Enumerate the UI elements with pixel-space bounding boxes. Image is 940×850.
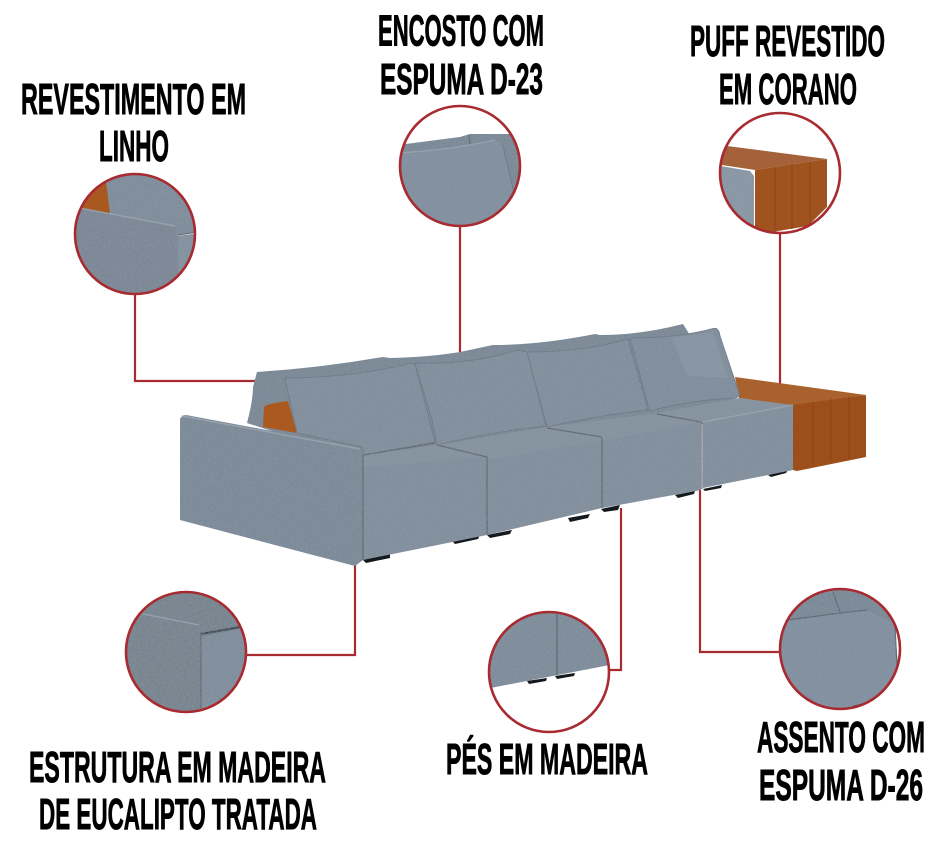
label: revestimento bbox=[21, 75, 246, 171]
orange detail bbox=[82, 182, 110, 213]
puff front bbox=[793, 395, 866, 471]
label: estrutura: ESTRUTURA EM MADEIRA bbox=[29, 743, 326, 792]
seat front bbox=[780, 610, 898, 709]
label: puff bbox=[690, 17, 885, 114]
seat tops bbox=[363, 398, 793, 470]
fabric bbox=[781, 590, 898, 708]
orange inner arm bbox=[263, 401, 297, 433]
callout circle: revestimento bbox=[76, 175, 194, 293]
back cushion 3 bbox=[527, 339, 648, 427]
back cushion 2 bbox=[415, 350, 546, 445]
armrest bbox=[180, 415, 363, 566]
seat bbox=[178, 234, 194, 274]
seat bbox=[202, 630, 245, 709]
grey seat bbox=[721, 166, 754, 226]
sofa bbox=[180, 324, 866, 566]
feet bbox=[527, 673, 575, 684]
label: revestimento: LINHO bbox=[99, 122, 169, 171]
callout ring bbox=[75, 174, 195, 294]
callout circle: pes bbox=[490, 613, 608, 688]
puff bbox=[735, 377, 866, 471]
label: estrutura: DE EUCALIPTO TRATADA bbox=[39, 790, 317, 839]
label: assento bbox=[757, 713, 925, 810]
seat fronts bbox=[363, 405, 793, 560]
seat fronts bbox=[490, 613, 608, 688]
puff top bbox=[715, 146, 827, 170]
front cushion bbox=[412, 143, 513, 225]
fabric bbox=[76, 175, 194, 293]
callout ring bbox=[489, 612, 609, 732]
label: encosto: ESPUMA D-23 bbox=[380, 55, 543, 104]
sofa body with fabric texture bbox=[180, 328, 793, 566]
callout ring bbox=[720, 113, 840, 233]
back cushion 4 bbox=[630, 328, 739, 411]
callout ring bbox=[400, 106, 520, 226]
puff front bbox=[755, 159, 827, 232]
callout circle: assento bbox=[781, 590, 898, 708]
sofa feet bbox=[362, 470, 788, 563]
fabric bbox=[401, 134, 519, 225]
label: estrutura bbox=[29, 743, 326, 839]
fabric bbox=[127, 593, 245, 711]
arm top edge bbox=[182, 416, 360, 449]
foot bbox=[853, 704, 862, 706]
callout ring bbox=[126, 592, 246, 712]
arm side bbox=[180, 415, 363, 566]
back grey bbox=[105, 174, 200, 235]
back bbox=[142, 593, 240, 637]
back cushions bbox=[790, 590, 892, 623]
arm bbox=[127, 645, 200, 711]
label: revestimento: REVESTIMENTO EM bbox=[21, 75, 246, 124]
callout ring bbox=[780, 589, 900, 709]
callout circle: encosto bbox=[401, 134, 519, 225]
leader lines bbox=[135, 226, 780, 670]
back cushion 1 bbox=[285, 363, 435, 455]
arm bbox=[76, 209, 178, 293]
label: encosto bbox=[378, 6, 544, 104]
callout circle: estrutura bbox=[127, 593, 245, 711]
rear cushions bbox=[403, 134, 519, 200]
back row cushions bbox=[247, 324, 735, 470]
label: encosto: ENCOSTO COM bbox=[378, 6, 544, 56]
callout circle: puff bbox=[721, 146, 827, 232]
label: pes: PÉS EM MADEIRA bbox=[446, 734, 648, 784]
puff top bbox=[735, 377, 866, 406]
